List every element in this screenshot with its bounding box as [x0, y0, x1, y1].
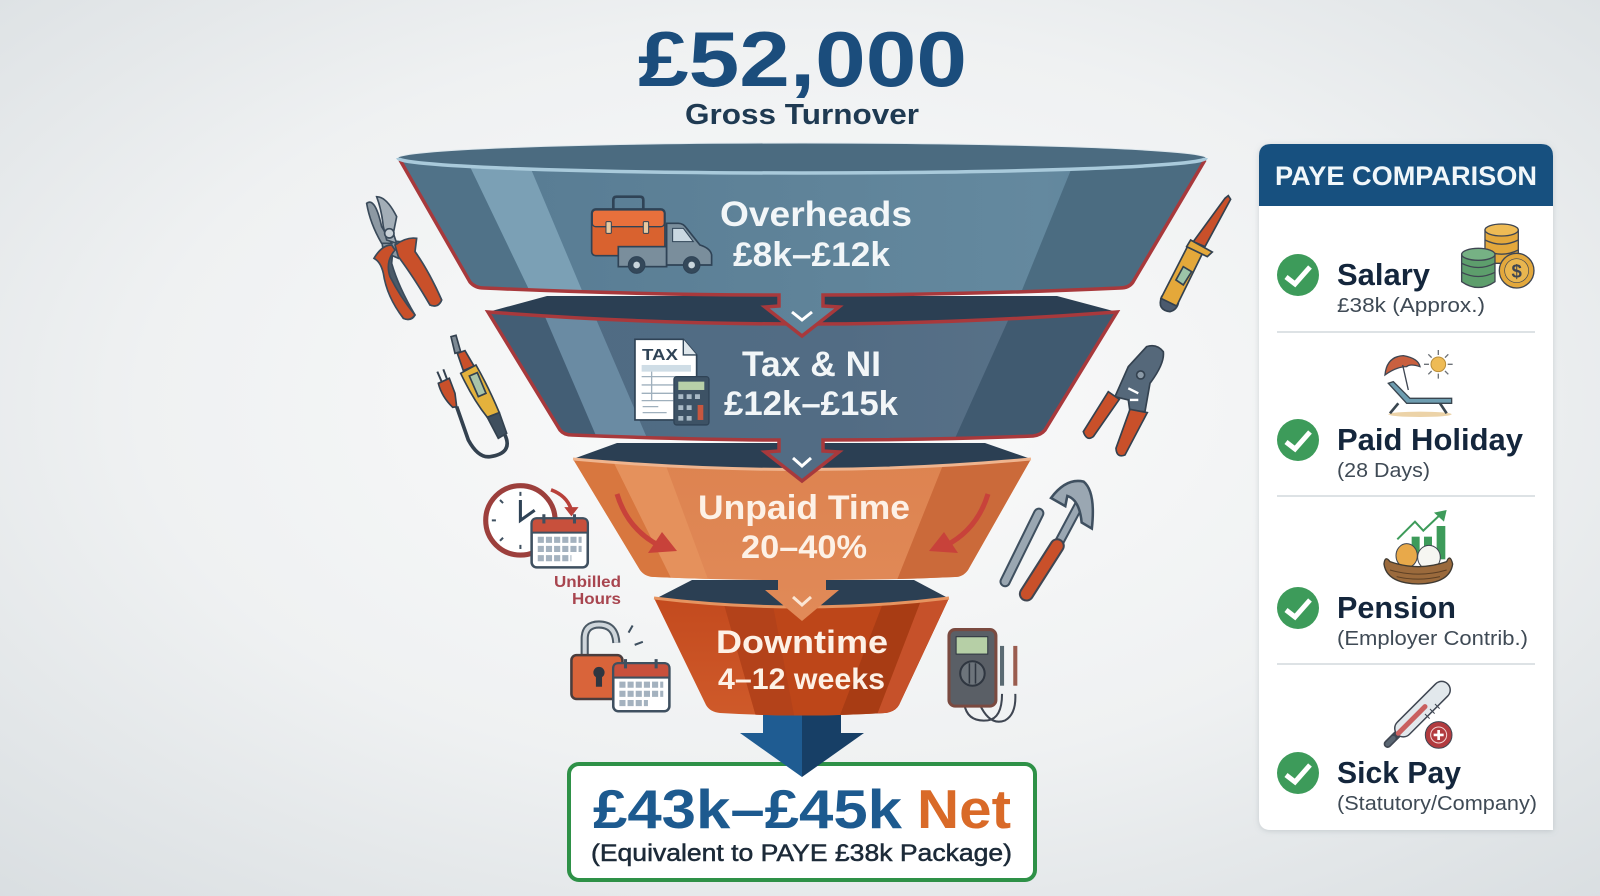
- icon: thermometer: [1388, 690, 1452, 748]
- icon: open lock and calendar: [571, 624, 669, 711]
- row: sick pay: [1277, 752, 1537, 815]
- arrow: squeeze from right: [929, 494, 988, 553]
- title: gross turnover: £52,000: [638, 15, 967, 103]
- row: paid holiday: [1277, 419, 1524, 482]
- icon: tax form and calculator: [635, 339, 709, 425]
- arrow: squeeze from left: [617, 494, 677, 553]
- funnel segment: tax and NI: Tax & NI: [742, 345, 881, 384]
- funnel segment: downtime: 4–12 weeks: [718, 663, 885, 696]
- label: unbilled hours: Hours: [572, 591, 621, 608]
- icon: coins: [1462, 224, 1534, 288]
- row: sick pay: Sick Pay: [1337, 755, 1462, 790]
- panel: PAYE comparison: [1259, 144, 1553, 830]
- icon: clock and calendar: [486, 486, 588, 567]
- row: pension: (Employer Contrib.): [1337, 628, 1528, 650]
- icon: coins: $: [1511, 261, 1522, 282]
- funnel segment: tax and NI: [480, 296, 1130, 481]
- row: salary: [1277, 254, 1485, 317]
- result box: net equivalent: Net: [917, 778, 1011, 840]
- icon: combination pliers: [367, 197, 442, 319]
- icon: voltage tester with lead: [437, 335, 507, 457]
- funnel segment: downtime: Downtime: [716, 624, 888, 660]
- funnel segment: downtime: [654, 580, 960, 720]
- result box: net equivalent: £43k–£45k: [593, 778, 902, 840]
- icon: nest egg and growth chart: [1384, 510, 1453, 584]
- icon: insulated screwdriver tester: [1160, 196, 1231, 312]
- funnel segment: unpaid time: 20–40%: [741, 529, 867, 565]
- row: salary: Salary: [1337, 257, 1431, 292]
- title: gross turnover: Gross Turnover: [685, 99, 919, 131]
- funnel segment: overheads: [380, 143, 1225, 336]
- icon: wire strippers: [1083, 346, 1163, 456]
- title: gross turnover: [638, 15, 967, 131]
- arrow: funnel output to result: [740, 712, 864, 777]
- icon: sun lounger: [1385, 350, 1453, 417]
- panel header: [1259, 144, 1553, 206]
- row: salary: £38k (Approx.): [1337, 295, 1485, 317]
- icon: toolbox and truck: [592, 197, 712, 273]
- funnel segment: unpaid time: [560, 443, 1045, 621]
- funnel segment: overheads: Overheads: [720, 195, 912, 234]
- row: pension: [1277, 587, 1528, 650]
- icon: grey screwdriver and wrench: [1005, 481, 1093, 594]
- row: pension: Pension: [1337, 590, 1456, 625]
- panel header: PAYE COMPARISON: [1275, 161, 1537, 191]
- icon group: unbilled hours: [486, 486, 621, 608]
- row: paid holiday: Paid Holiday: [1337, 422, 1524, 457]
- row: paid holiday: (28 Days): [1337, 460, 1430, 482]
- label: unbilled hours: Unbilled: [554, 574, 621, 591]
- icon: tax form and calculator: TAX: [642, 347, 678, 364]
- result box: net equivalent: [569, 764, 1035, 880]
- row: sick pay: (Statutory/Company): [1337, 793, 1537, 815]
- icon: multimeter: [949, 630, 1015, 722]
- funnel segment: overheads: £8k–£12k: [733, 236, 890, 274]
- funnel segment: tax and NI: £12k–£15k: [724, 385, 898, 423]
- result box: net equivalent: (Equivalent to PAYE £38k Package): [591, 840, 1012, 867]
- label: unbilled hours: [554, 574, 621, 608]
- funnel segment: unpaid time: Unpaid Time: [698, 489, 910, 527]
